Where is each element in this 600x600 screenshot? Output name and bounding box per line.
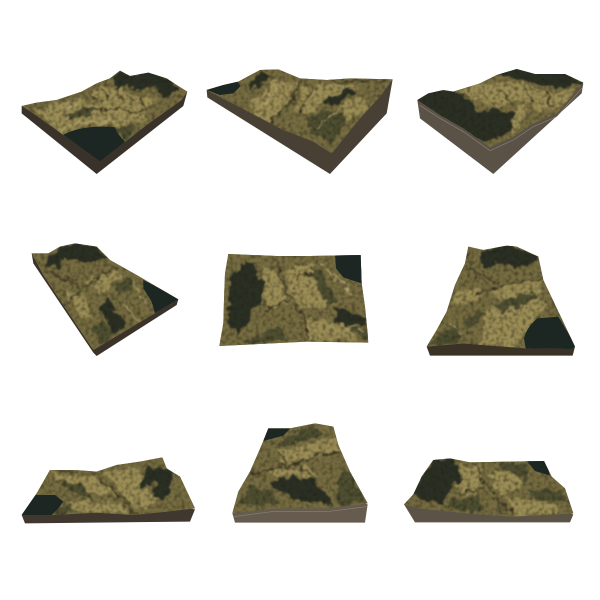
block 3 side wall: [417, 83, 583, 174]
terrain block 3: top right: [417, 69, 584, 174]
terrain block 4: middle left: [32, 243, 178, 356]
block 5 water: [335, 255, 362, 284]
block 1 water: [62, 127, 126, 163]
block 7 water: [22, 495, 64, 515]
block 8 terrain surface: [232, 423, 368, 514]
block 8 strata line: [233, 507, 367, 517]
block 8 water: [263, 427, 292, 441]
block 8 side wall: [232, 482, 368, 523]
block 2 side wall: [207, 79, 393, 174]
terrain block 7: bottom left: [22, 457, 195, 524]
block 1 terrain surface: [22, 70, 188, 162]
block 2 terrain surface: [206, 69, 392, 154]
terrain block 1: top left: [22, 70, 188, 174]
block 6 side wall: [427, 318, 575, 356]
block 3 terrain surface: [418, 69, 584, 148]
terrain block 2: top centre: [206, 69, 393, 174]
block 7 side wall: [22, 493, 195, 523]
block 9 side wall: [404, 485, 573, 522]
block 4 terrain surface: [32, 243, 178, 350]
terrain block 6: middle right: [426, 246, 575, 356]
block 4 water: [143, 280, 180, 313]
block 4 side wall: [32, 253, 178, 356]
block 6 water: [524, 317, 578, 350]
terrain block 8: bottom centre: [232, 423, 368, 523]
block 9 terrain surface: [404, 458, 574, 516]
terrain block 9: bottom right: [404, 458, 574, 522]
block 7 terrain surface: [22, 457, 195, 515]
block 6 terrain surface: [426, 246, 575, 349]
block 5 terrain surface: [219, 254, 368, 346]
block 1 side wall: [22, 92, 187, 174]
terrain block 5: middle centre: [219, 254, 368, 346]
block 3 strata line: [419, 87, 583, 151]
block 2 water: [205, 82, 241, 95]
block 9 water: [526, 460, 550, 476]
